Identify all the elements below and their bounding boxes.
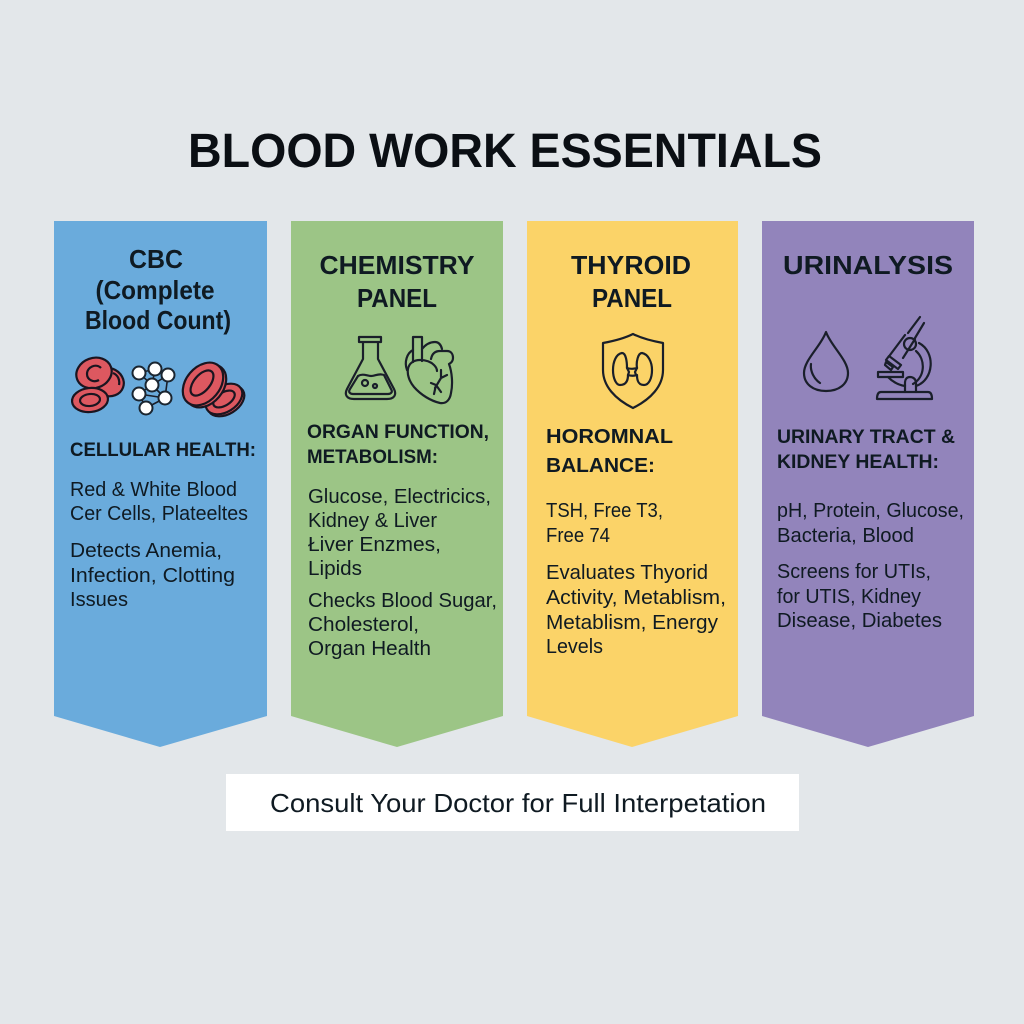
- text: CBC purpose: Infection, Clotting: [70, 564, 235, 587]
- text: chemistry purpose: [308, 589, 497, 660]
- text: thyroid purpose: [546, 561, 726, 658]
- subheading: hormonal balance: HOROMNAL: [546, 425, 673, 448]
- text: thyroid purpose: Activity, Metablism,: [546, 586, 726, 609]
- heading: CBC: (Complete: [96, 275, 214, 305]
- heading: urinalysis: URINALYSIS: [783, 250, 953, 280]
- subheading: urinary tract: [777, 427, 955, 473]
- subheading: organ function: METABOLISM:: [307, 447, 438, 468]
- panel: CBC: [54, 221, 267, 747]
- text: thyroid purpose: Evaluates Thyorid: [546, 561, 708, 584]
- text: chemistry components: Kidney & Liver: [308, 509, 437, 532]
- text: urinalysis components: pH, Protein, Glucose,: [777, 499, 964, 522]
- text: thyroid purpose: Levels: [546, 635, 603, 658]
- text: thyroid components: Free 74: [546, 524, 610, 547]
- text: chemistry purpose: Checks Blood Sugar,: [308, 589, 497, 612]
- heading: thyroid panel: PANEL: [592, 283, 672, 313]
- text: CBC purpose: Detects Anemia,: [70, 539, 222, 562]
- icon: blood cells: [71, 353, 250, 423]
- heading: thyroid panel: [571, 250, 691, 313]
- heading: chemistry panel: CHEMISTRY: [320, 250, 474, 280]
- text: CBC components: Red & White Blood: [70, 478, 237, 501]
- text: CBC components: Cer Cells, Plateeltes: [70, 502, 248, 525]
- text: chemistry components: Glucose, Electricics,: [308, 485, 491, 508]
- heading: CBC: [85, 244, 231, 335]
- panel: chemistry panel: [291, 221, 503, 747]
- heading: chemistry panel: PANEL: [357, 283, 437, 313]
- text: urinalysis purpose: Disease, Diabetes: [777, 609, 942, 632]
- text: thyroid purpose: Metablism, Energy: [546, 611, 719, 634]
- callout: consult your doctor: [226, 774, 799, 831]
- text: chemistry components: Łiver Enzmes,: [308, 533, 441, 556]
- panel: thyroid panel: [527, 221, 738, 747]
- text: CBC components: [70, 478, 248, 525]
- text: urinalysis components: [777, 499, 964, 547]
- callout: consult your doctor: Consult Your Doctor for Full Interpetation: [270, 788, 766, 818]
- icon: flask: [346, 337, 395, 399]
- text: chemistry components: [308, 485, 491, 580]
- title: BLOOD WORK ESSENTIALS: [188, 125, 822, 178]
- text: urinalysis purpose: Screens for UTIs,: [777, 560, 931, 583]
- subheading: cellular health: CELLULAR HEALTH:: [70, 440, 256, 461]
- text: thyroid components: [546, 499, 663, 547]
- icon: microscope: [877, 317, 932, 399]
- subheading: urinary tract: KIDNEY HEALTH:: [777, 452, 939, 473]
- subheading: hormonal balance: BALANCE:: [546, 454, 655, 477]
- text: chemistry components: Lipids: [308, 557, 362, 580]
- heading: thyroid panel: THYROID: [571, 250, 691, 280]
- icon: drop: [804, 332, 848, 391]
- icon: heart: [406, 337, 453, 403]
- subheading: organ function: [307, 422, 489, 468]
- subheading: organ function: ORGAN FUNCTION,: [307, 422, 489, 443]
- text: urinalysis components: Bacteria, Blood: [777, 524, 914, 547]
- icon: thyroid shield: [603, 334, 663, 408]
- text: chemistry purpose: Cholesterol,: [308, 613, 419, 636]
- subheading: hormonal balance: [546, 425, 673, 477]
- heading: chemistry panel: [320, 250, 474, 313]
- subheading: urinary tract: URINARY TRACT &: [777, 427, 955, 448]
- text: CBC purpose: [70, 539, 235, 611]
- text: chemistry purpose: Organ Health: [308, 637, 431, 660]
- heading: CBC: CBC: [129, 244, 183, 274]
- text: urinalysis purpose: [777, 560, 942, 632]
- text: thyroid components: TSH, Free T3,: [546, 499, 663, 522]
- heading: CBC: Blood Count): [85, 305, 231, 335]
- panel: urinalysis: [762, 221, 974, 747]
- text: urinalysis purpose: for UTIS, Kidney: [777, 585, 922, 608]
- text: CBC purpose: Issues: [70, 588, 128, 611]
